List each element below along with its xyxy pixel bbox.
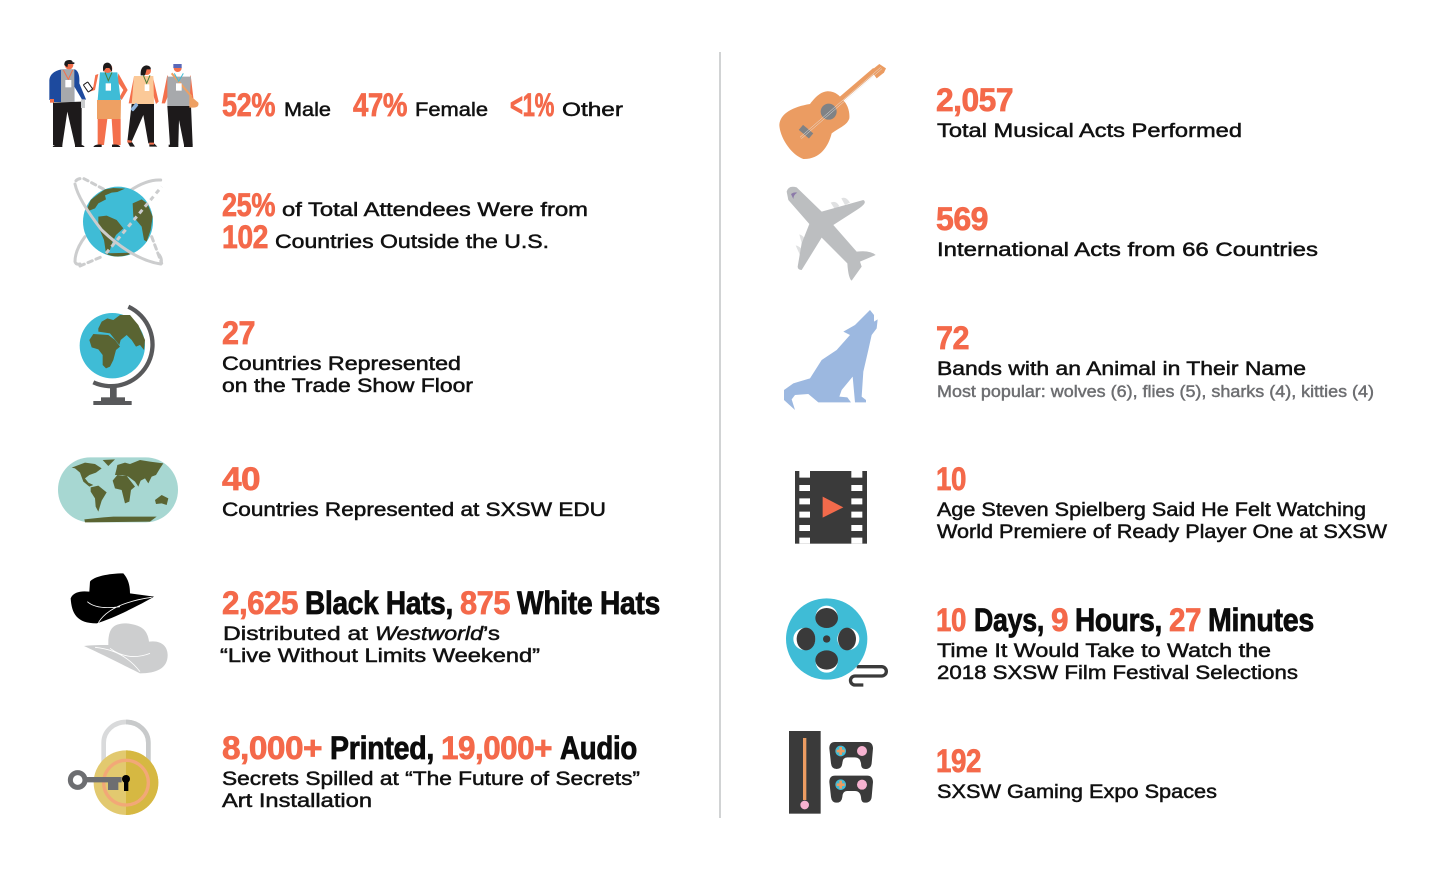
- icon: film reel: [786, 598, 886, 685]
- hats statistic: “Live Without Limits Weekend”: [220, 645, 540, 667]
- gender statistics: [222, 87, 624, 123]
- gender statistics: 47%: [353, 87, 407, 123]
- trade show statistic: 27: [222, 315, 255, 351]
- Spielberg statistic: 10: [936, 461, 966, 497]
- icon: desk globe: [80, 307, 153, 405]
- row: gaming: [789, 731, 1217, 814]
- Spielberg statistic: Age Steven Spielberg Said He Felt Watching: [937, 499, 1366, 521]
- row: secrets: [70, 722, 640, 815]
- film festival statistic: Hours,: [1075, 602, 1162, 638]
- row: musical acts: [779, 64, 1242, 159]
- icon: world map: [58, 457, 178, 522]
- animal bands statistic: Most popular: wolves (6), flies (5), sharks (4), kitties (4): [937, 383, 1374, 401]
- icon: black and white hats: [71, 573, 168, 673]
- hats statistic: ’s: [483, 623, 500, 645]
- hats statistic: [220, 585, 660, 667]
- film festival statistic: 10: [936, 602, 966, 638]
- row: trade show: [80, 307, 474, 405]
- secrets statistic: Art Installation: [222, 790, 372, 812]
- trade show statistic: Countries Represented: [222, 353, 461, 375]
- secrets statistic: Printed,: [330, 730, 434, 766]
- film festival statistic: Minutes: [1208, 602, 1314, 638]
- film festival statistic: Days,: [974, 602, 1044, 638]
- icon: howling wolf: [784, 310, 878, 410]
- gender statistics: Other: [562, 99, 624, 121]
- attendees statistics: 102: [222, 219, 268, 255]
- icon: four attendees: [49, 60, 198, 147]
- EDU statistic: [222, 461, 606, 521]
- row: film festival: [786, 598, 1314, 685]
- gender statistics: <1%: [510, 87, 554, 123]
- secrets statistic: 8,000+: [222, 730, 322, 766]
- row: hats: [71, 573, 660, 673]
- icon: globe with orbits: [75, 178, 162, 266]
- film festival statistic: 27: [1169, 602, 1201, 638]
- musical acts statistic: 2,057: [936, 82, 1013, 118]
- film festival statistic: Time It Would Take to Watch the: [937, 640, 1271, 662]
- row: international attendees: [75, 178, 588, 266]
- row: international acts: [787, 187, 1318, 281]
- trade show statistic: [222, 315, 474, 397]
- international acts statistic: International Acts from 66 Countries: [937, 239, 1318, 261]
- hats statistic: Westworld: [375, 623, 484, 645]
- secrets statistic: Audio: [560, 730, 637, 766]
- row: animal bands: [784, 310, 1374, 410]
- icon: arcade tower and controllers: [789, 731, 873, 814]
- trade show statistic: on the Trade Show Floor: [222, 375, 474, 397]
- icon: padlock and key: [70, 722, 158, 815]
- hats statistic: Black Hats,: [305, 585, 453, 621]
- hats statistic: Distributed at: [223, 623, 369, 645]
- center divider: [719, 52, 721, 818]
- secrets statistic: 19,000+: [441, 730, 552, 766]
- hats statistic: 2,625: [222, 585, 298, 621]
- row: attendee gender: [49, 60, 624, 147]
- gender statistics: 52%: [222, 87, 275, 123]
- gaming statistic: [936, 743, 1217, 803]
- gaming statistic: SXSW Gaming Expo Spaces: [937, 781, 1217, 803]
- international acts statistic: 569: [936, 201, 988, 237]
- EDU statistic: Countries Represented at SXSW EDU: [222, 499, 606, 521]
- icon: airplane: [787, 187, 876, 281]
- film festival statistic: 2018 SXSW Film Festival Selections: [937, 662, 1298, 684]
- icon: film strip with play button: [795, 471, 867, 544]
- Spielberg statistic: World Premiere of Ready Player One at SXSW: [937, 521, 1388, 543]
- gender statistics: Male: [284, 99, 331, 121]
- hats statistic: 875: [460, 585, 510, 621]
- musical acts statistic: [936, 82, 1242, 142]
- attendees statistics: of Total Attendees Were from: [282, 199, 588, 221]
- icon: guitar: [779, 64, 886, 159]
- secrets statistic: [222, 730, 640, 812]
- gender statistics: Female: [415, 99, 488, 121]
- row: SXSW EDU: [58, 457, 606, 522]
- animal bands statistic: 72: [936, 320, 969, 356]
- attendees statistics: [222, 187, 588, 255]
- animal bands statistic: [936, 320, 1374, 401]
- Spielberg statistic: [936, 461, 1388, 543]
- film festival statistic: 9: [1051, 602, 1068, 638]
- film festival statistic: [936, 602, 1314, 684]
- attendees statistics: Countries Outside the U.S.: [275, 231, 549, 253]
- musical acts statistic: Total Musical Acts Performed: [937, 120, 1242, 142]
- secrets statistic: Secrets Spilled at “The Future of Secrets”: [222, 768, 640, 790]
- attendees statistics: 25%: [222, 187, 275, 223]
- animal bands statistic: Bands with an Animal in Their Name: [937, 358, 1306, 380]
- international acts statistic: [936, 201, 1318, 261]
- hats statistic: White Hats: [517, 585, 660, 621]
- gaming statistic: 192: [936, 743, 981, 779]
- row: Spielberg: [795, 461, 1388, 544]
- EDU statistic: 40: [222, 461, 260, 497]
